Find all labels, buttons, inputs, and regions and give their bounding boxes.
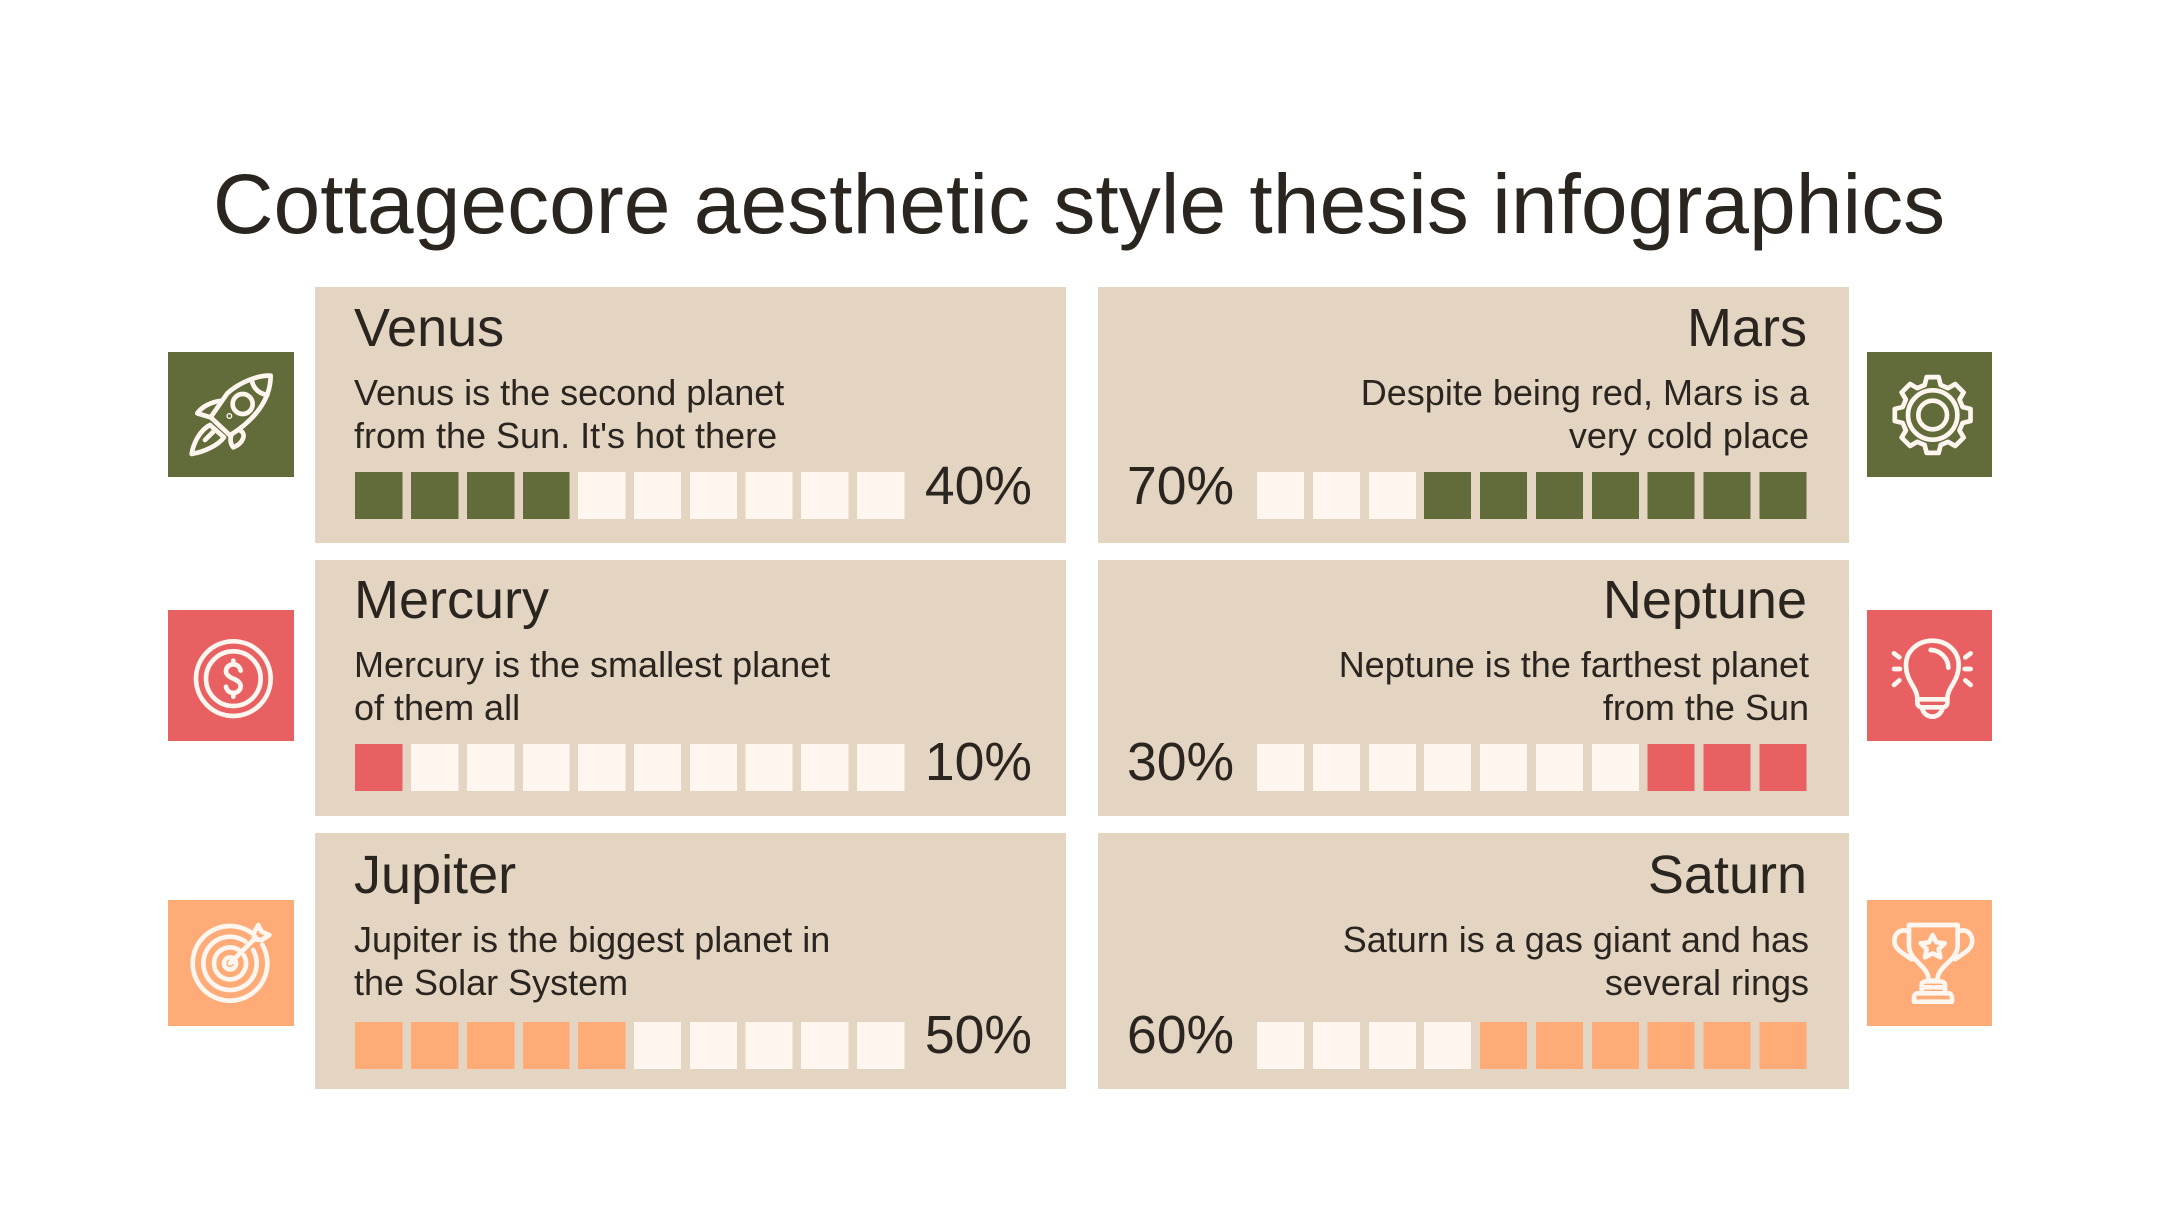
- heading: Neptune: Neptune: [1603, 570, 1807, 630]
- text: Mercury description: Mercury is the smallest planet: [354, 644, 830, 685]
- text: Saturn description: Saturn is a gas giant and has: [1343, 919, 1809, 960]
- text: Venus description: from the Sun. It's hot there: [354, 415, 777, 456]
- text: Saturn description: several rings: [1605, 962, 1809, 1003]
- text: Jupiter description: Jupiter is the biggest planet in: [354, 919, 830, 960]
- value: 60%: 60%: [1127, 1006, 1234, 1065]
- heading: Jupiter: Jupiter: [354, 845, 516, 905]
- panel: Mars: [1098, 287, 1849, 543]
- text: Mercury description: of them all: [354, 687, 520, 728]
- panel: Saturn: [1098, 833, 1849, 1089]
- heading: Venus: Venus: [354, 298, 504, 358]
- text: Jupiter description: the Solar System: [354, 962, 628, 1003]
- icon: trophy: [1867, 900, 1992, 1026]
- icon: rocket: [168, 352, 294, 477]
- heading: Mercury: Mercury: [354, 570, 549, 630]
- value: 70%: 70%: [1127, 457, 1234, 516]
- text: Mars description: Despite being red, Mars is a: [1361, 372, 1810, 413]
- text: Neptune description: Neptune is the farthest planet: [1339, 644, 1809, 685]
- text: Venus description: Venus is the second planet: [354, 372, 784, 413]
- progress bar: Mercury 10%: [355, 744, 904, 791]
- panel: Mercury: [315, 560, 1066, 816]
- icon: light bulb: [1867, 610, 1992, 741]
- progress bar: Mars 70%: [1257, 472, 1806, 519]
- value: 40%: 40%: [925, 457, 1032, 516]
- title: Cottagecore aesthetic style thesis infographics: [213, 157, 1945, 251]
- text: Neptune description: from the Sun: [1603, 687, 1809, 728]
- icon: gear: [1867, 352, 1992, 477]
- progress bar: Neptune 30%: [1257, 744, 1806, 791]
- panel: Venus: [315, 287, 1066, 543]
- value: 30%: 30%: [1127, 733, 1234, 792]
- panel: Neptune: [1098, 560, 1849, 816]
- heading: Mars: Mars: [1687, 298, 1807, 358]
- value: 50%: 50%: [925, 1006, 1032, 1065]
- progress bar: Venus 40%: [355, 472, 904, 519]
- value: 10%: 10%: [925, 733, 1032, 792]
- heading: Saturn: Saturn: [1648, 845, 1807, 905]
- panel: Jupiter: [315, 833, 1066, 1089]
- progress bar: Jupiter 50%: [355, 1022, 904, 1069]
- progress bar: Saturn 60%: [1257, 1022, 1806, 1069]
- icon: coin: [168, 610, 294, 741]
- text: Mars description: very cold place: [1569, 415, 1809, 456]
- icon: target: [168, 900, 294, 1026]
